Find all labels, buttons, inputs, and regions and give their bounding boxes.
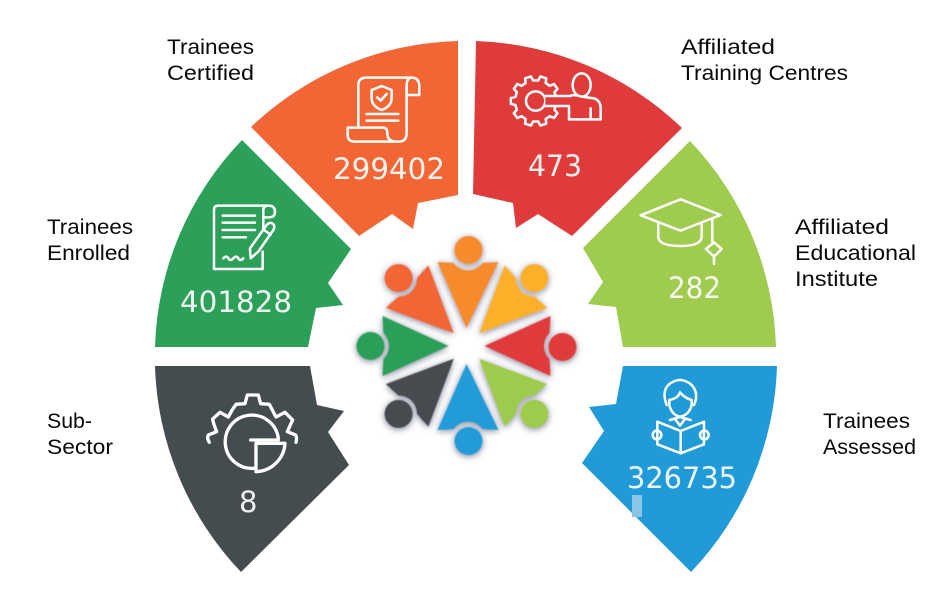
label: trainees certified: Trainees — [167, 36, 254, 59]
label: trainees certified: Certified — [167, 62, 254, 85]
figure: yellow — [458, 247, 565, 354]
icon: student reading — [653, 380, 709, 453]
icon: gear with pie chart — [208, 395, 297, 472]
figure: green — [356, 316, 448, 376]
figure: red — [484, 316, 576, 376]
wedge: green — [155, 140, 351, 347]
label: sub-sector: Sector — [47, 436, 113, 459]
label: trainees assessed: Trainees — [823, 410, 910, 433]
figure: dark grey — [368, 338, 475, 445]
light smudge on blue wedge — [632, 495, 642, 517]
label: trainees enrolled: Trainees — [47, 216, 133, 239]
number: trainees certified: 299402 — [333, 152, 445, 186]
icon: graduation cap — [641, 199, 722, 264]
label: trainees assessed: Assessed — [823, 436, 916, 459]
figure: light green — [458, 338, 565, 445]
wedge: blue — [582, 366, 777, 572]
panel: trainees enrolled — [47, 140, 351, 347]
central logo: eight figures in a circle — [356, 236, 576, 455]
panel: sub-sector — [47, 366, 349, 572]
wedge: light green — [583, 141, 776, 347]
label: affiliated educational institute: Affiliated — [795, 216, 889, 239]
wedge: red — [473, 41, 682, 236]
wedge: dark grey — [155, 366, 349, 572]
number: trainees assessed: 326735 — [627, 461, 737, 495]
wedge: orange — [251, 41, 458, 236]
panel: trainees assessed — [582, 366, 916, 572]
number: affiliated training centres: 473 — [528, 149, 582, 183]
panel: trainees certified — [167, 36, 458, 236]
label: sub-sector: Sub- — [47, 410, 92, 433]
panel: affiliated educational institute — [583, 141, 916, 347]
label: trainees enrolled: Enrolled — [47, 242, 130, 265]
label: affiliated educational institute: Educational — [795, 242, 916, 265]
icon: signed document — [214, 206, 275, 269]
number: affiliated educational institute: 282 — [668, 271, 721, 305]
icon: gear and person — [511, 73, 601, 126]
figure: red-orange — [368, 247, 475, 354]
number: trainees enrolled: 401828 — [180, 285, 292, 319]
label: affiliated training centres: Affiliated — [681, 36, 775, 59]
number: sub-sector: 8 — [239, 485, 257, 519]
label: affiliated training centres: Training Centres — [681, 62, 848, 85]
panel: affiliated training centres — [473, 36, 848, 236]
icon: certificate scroll — [348, 78, 419, 142]
label: affiliated educational institute: Institute — [795, 268, 878, 291]
figure: blue — [438, 364, 498, 455]
figure: orange — [438, 236, 498, 328]
